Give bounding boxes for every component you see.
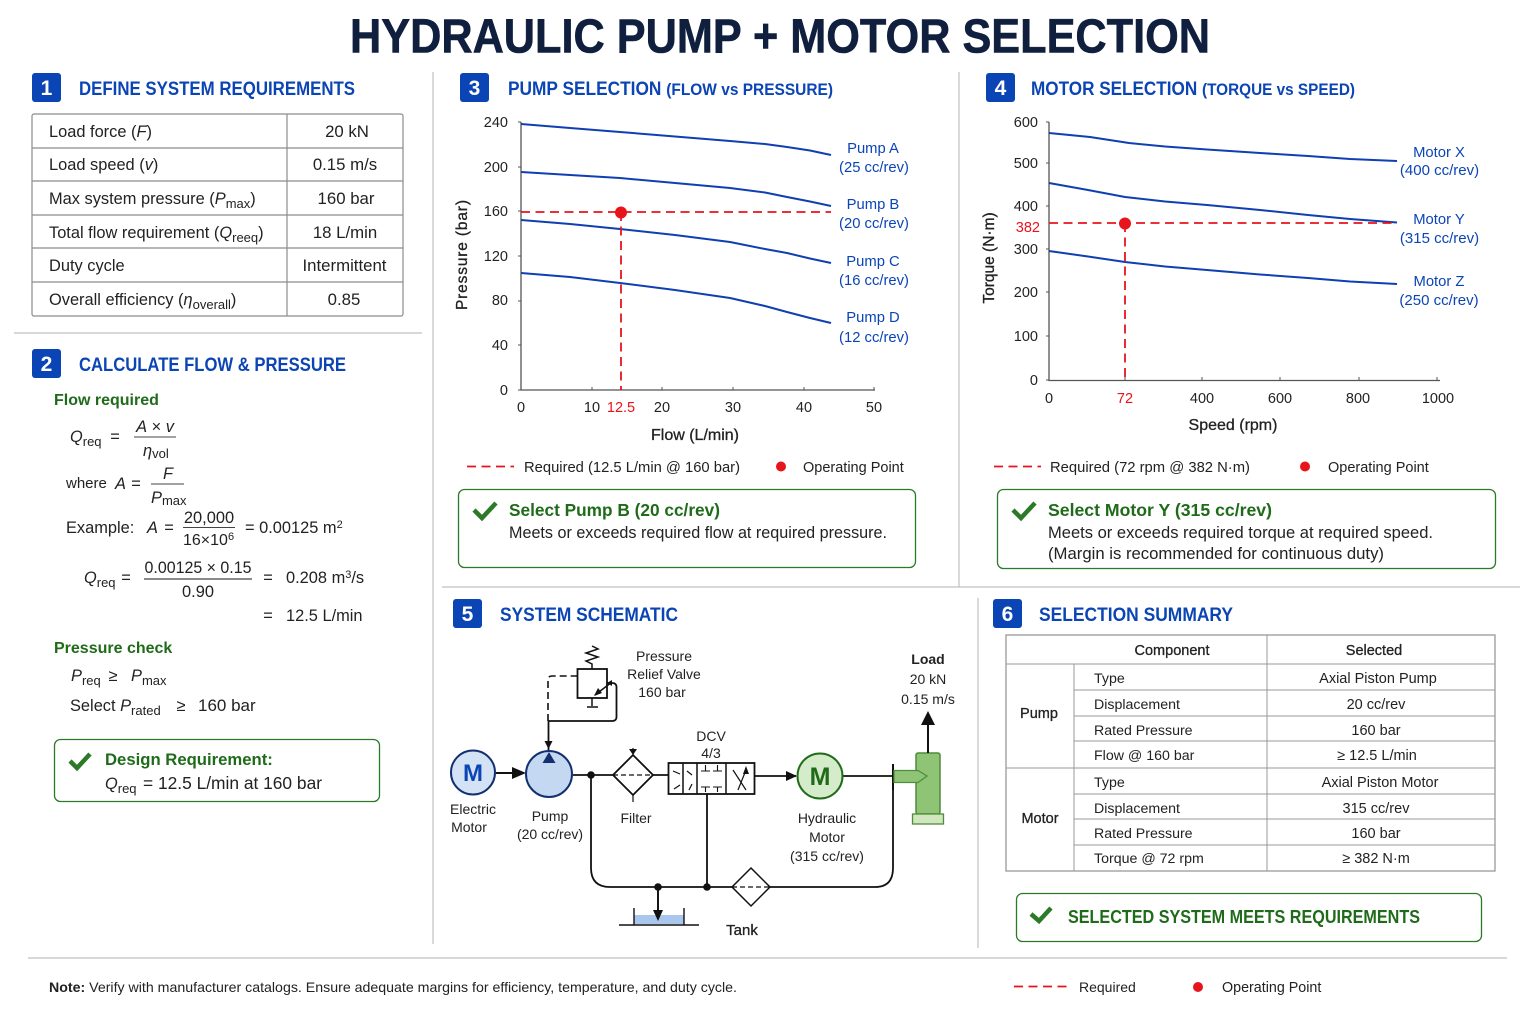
summary table: ≥ 382 N·m <box>1342 851 1410 867</box>
pump chart: 20 <box>654 400 670 416</box>
flow equations: η <box>143 442 152 460</box>
flow equations: req <box>97 575 116 590</box>
summary table: 160 bar <box>1351 723 1401 739</box>
pump chart legend: Operating Point <box>803 460 904 476</box>
hydraulic lines <box>544 676 893 918</box>
pump chart: 120 <box>484 249 508 265</box>
heading 3: PUMP SELECTION (FLOW vs PRESSURE) <box>508 79 833 100</box>
heading 2: 2 <box>41 353 52 376</box>
flow equations: A <box>146 519 158 537</box>
requirements table: ) <box>231 291 236 309</box>
icon: tank <box>619 890 699 925</box>
motor chart: 400 <box>1014 199 1038 215</box>
label: directional control valve: DCV <box>696 728 726 744</box>
requirements table: ) <box>250 190 256 208</box>
label: load: 20 kN <box>910 671 946 687</box>
summary table: Motor <box>1021 811 1059 827</box>
summary table: Component <box>1135 643 1209 659</box>
motor chart: 600 <box>1268 391 1292 407</box>
icon: pump <box>526 751 572 797</box>
summary table: Type <box>1094 775 1125 791</box>
requirements table: Max system pressure (P <box>49 190 226 208</box>
label: load: Load <box>911 651 945 667</box>
requirements table: Duty cycle <box>49 257 125 275</box>
flow equations: vol <box>152 446 169 461</box>
heading 5: 5 <box>462 603 474 626</box>
requirements table: Total flow requirement (Q <box>49 224 232 242</box>
label: filter: Filter <box>620 810 652 826</box>
flow equations: Example: <box>66 519 134 537</box>
heading 6 <box>993 599 1233 628</box>
flow equations: = <box>263 569 273 587</box>
requirements table: Overall efficiency (η <box>49 291 193 309</box>
flow required subheading: Flow required <box>54 392 159 409</box>
callout: design requirement: = 12.5 L/min at 160 bar <box>143 773 322 793</box>
summary table: Type <box>1094 671 1125 687</box>
summary table <box>1006 635 1495 871</box>
pump chart: 10 <box>584 400 600 416</box>
summary table: Displacement <box>1094 801 1180 817</box>
pressure equations: P <box>131 667 142 685</box>
callout: select motor Y: (Margin is recommended for continuous duty) <box>1048 545 1384 563</box>
pump chart <box>454 115 909 444</box>
heading 1 <box>32 73 355 102</box>
motor chart: 1000 <box>1422 391 1454 407</box>
summary table: Rated Pressure <box>1094 723 1193 739</box>
requirements table: 0.85 <box>328 290 360 309</box>
motor chart: 100 <box>1014 329 1038 345</box>
icon: return filter <box>732 868 770 906</box>
flow equations: = <box>131 475 141 493</box>
requirements table: 18 L/min <box>313 223 377 242</box>
callout: design requirement: Design Requirement: <box>105 750 273 769</box>
summary table: Axial Piston Pump <box>1319 671 1437 687</box>
pressure equations: 160 bar <box>198 696 256 715</box>
summary table: Rated Pressure <box>1094 826 1193 842</box>
summary table: Flow @ 160 bar <box>1094 748 1195 764</box>
requirements table: Intermittent <box>303 256 387 275</box>
pressure equations: rated <box>131 703 161 718</box>
pump chart: 0 <box>500 383 508 399</box>
flow equations: /s <box>351 569 364 587</box>
pump chart: Pump A <box>847 141 899 157</box>
callout: select motor Y: Meets or exceeds required torque at required speed. <box>1048 524 1433 542</box>
summary table: Axial Piston Motor <box>1322 775 1439 791</box>
footer legend: Operating Point <box>1222 980 1321 996</box>
heading 3: 3 <box>469 77 480 100</box>
footer note: Note: Verify with manufacturer catalogs. Ensure adequate margins for efficiency, temperature, and duty cycle. <box>49 979 737 995</box>
flow equations: A <box>114 475 126 493</box>
flow equations: 0.208 m <box>286 569 345 587</box>
motor chart: 500 <box>1014 156 1038 172</box>
callout: design requirement <box>54 740 380 802</box>
flow equations: 2 <box>337 519 343 531</box>
flow equations: 12.5 L/min <box>286 607 363 625</box>
label: load: 0.15 m/s <box>901 691 955 707</box>
motor chart legend <box>994 460 1429 476</box>
pump chart: (25 cc/rev) <box>839 160 909 176</box>
requirements table: 160 bar <box>318 189 375 208</box>
panel: define system requirements <box>32 73 403 316</box>
flow equations: where <box>65 475 107 492</box>
flow equations: = <box>121 569 131 587</box>
pressure equations: max <box>142 673 167 688</box>
flow equations: req <box>83 434 102 449</box>
requirements table: max <box>226 196 251 211</box>
pump chart: 40 <box>796 400 812 416</box>
flow equations: = <box>110 428 120 446</box>
title: HYDRAULIC PUMP + MOTOR SELECTION <box>350 10 1210 64</box>
pump chart: Flow (L/min) <box>651 427 739 444</box>
pump chart: 50 <box>866 400 882 416</box>
icon: hydraulic motor: M <box>810 763 830 791</box>
icon: directional control valve <box>668 763 754 794</box>
heading 3 <box>460 73 833 102</box>
pump chart: Pump C <box>846 254 900 270</box>
label: pressure relief valve: 160 bar <box>638 684 686 700</box>
label: hydraulic motor: Motor <box>809 829 845 845</box>
pump chart: 30 <box>725 400 741 416</box>
label: electric motor: Motor <box>451 819 487 835</box>
requirements table: ) <box>258 224 264 242</box>
motor chart: 200 <box>1014 285 1038 301</box>
icon: actuator cylinder <box>893 711 944 824</box>
callout: design requirement: req <box>118 781 137 796</box>
motor chart: 400 <box>1190 391 1214 407</box>
callout: select motor Y: Select Motor Y (315 cc/rev) <box>1048 500 1272 520</box>
flow equations: max <box>162 493 187 508</box>
icon: electric motor: M <box>463 760 483 787</box>
motor chart: Motor Y <box>1413 212 1465 228</box>
flow equations: Q <box>70 428 83 446</box>
motor chart: (250 cc/rev) <box>1399 292 1479 309</box>
motor chart: Motor Z <box>1414 274 1464 290</box>
label: hydraulic motor: (315 cc/rev) <box>790 848 864 864</box>
flow equations: Q <box>84 569 97 587</box>
pump chart: (16 cc/rev) <box>839 273 909 289</box>
pressure equations: ≥ <box>176 697 186 715</box>
heading 5 <box>453 599 678 628</box>
flow equations: = 0.00125 m <box>245 519 337 537</box>
motor chart: 300 <box>1014 242 1038 258</box>
flow equations: 6 <box>228 531 234 543</box>
requirements table: reeq <box>232 230 258 245</box>
motor chart: Motor X <box>1413 145 1465 161</box>
summary table: ≥ 12.5 L/min <box>1337 748 1417 764</box>
pump chart: 12.5 <box>607 400 635 416</box>
summary table: Torque @ 72 rpm <box>1094 851 1204 867</box>
pump chart: Pump D <box>846 310 900 326</box>
flow equations: F <box>163 465 174 483</box>
heading 5: SYSTEM SCHEMATIC <box>500 605 678 626</box>
label: pressure relief valve: Pressure <box>636 648 692 664</box>
motor chart: Torque (N·m) <box>981 212 998 304</box>
label: tank: Tank <box>726 922 758 939</box>
motor chart: (400 cc/rev) <box>1400 162 1479 179</box>
callout: select pump B <box>458 490 916 568</box>
callout: select pump B: Select Pump B (20 cc/rev) <box>509 500 720 520</box>
panel: calculate flow and pressure <box>32 349 380 802</box>
pressure equations: ≥ <box>108 667 118 685</box>
motor chart: Speed (rpm) <box>1189 417 1277 434</box>
label: pressure relief valve: Relief Valve <box>627 666 701 682</box>
pump chart: 0 <box>517 400 525 416</box>
icon: electric motor <box>451 750 526 794</box>
pressure equations: Select P <box>70 697 131 715</box>
heading 6: SELECTION SUMMARY <box>1039 605 1233 626</box>
requirements table: Load force (F) <box>49 123 152 141</box>
flow equations: P <box>151 489 162 507</box>
heading 2: CALCULATE FLOW & PRESSURE <box>79 355 346 376</box>
footer legend <box>1014 979 1321 996</box>
callout: select pump B: Meets or exceeds required flow at required pressure. <box>509 524 887 542</box>
flow equations: 0.90 <box>182 583 214 601</box>
motor chart: 800 <box>1346 391 1370 407</box>
panel: selection summary <box>993 599 1495 942</box>
pressure equations: P <box>71 667 82 685</box>
pump chart: 240 <box>484 115 508 131</box>
heading 1: DEFINE SYSTEM REQUIREMENTS <box>79 79 355 100</box>
pump chart: (20 cc/rev) <box>839 216 909 232</box>
pump chart: 200 <box>484 160 508 176</box>
flow equations: 20,000 <box>184 509 234 527</box>
label: pump: Pump <box>532 808 568 824</box>
heading 2 <box>32 349 346 378</box>
heading 6: 6 <box>1002 603 1013 626</box>
motor chart: (315 cc/rev) <box>1400 230 1479 247</box>
pump chart: 160 <box>484 204 508 220</box>
panel: motor selection <box>981 73 1496 568</box>
motor chart legend: Required (72 rpm @ 382 N·m) <box>1050 460 1250 476</box>
flow equations: 3 <box>345 569 351 581</box>
motor chart: 0 <box>1030 373 1038 389</box>
callout: system meets requirements <box>1016 894 1482 942</box>
motor chart legend: Operating Point <box>1328 460 1429 476</box>
motor chart: 72 <box>1117 391 1133 407</box>
heading 4: MOTOR SELECTION (TORQUE vs SPEED) <box>1031 79 1355 100</box>
icon: filter <box>613 748 653 802</box>
label: hydraulic motor: Hydraulic <box>798 810 856 826</box>
motor chart: 600 <box>1014 115 1038 131</box>
requirements table: 0.15 m/s <box>313 155 377 174</box>
summary table: 315 cc/rev <box>1343 801 1410 817</box>
pressure equations <box>70 667 256 718</box>
motor chart: 0 <box>1045 391 1053 407</box>
flow equations <box>65 418 364 625</box>
footer legend: Required <box>1079 979 1136 995</box>
pump chart legend <box>467 460 904 476</box>
requirements table <box>32 114 403 316</box>
summary table: Selected <box>1346 643 1402 659</box>
heading 4 <box>986 73 1355 102</box>
requirements table: overall <box>193 297 231 312</box>
pump chart: 80 <box>492 293 508 309</box>
pump chart legend: Required (12.5 L/min @ 160 bar) <box>524 460 740 476</box>
pump chart: Pressure (bar) <box>454 200 471 310</box>
panel: pump selection <box>454 73 916 568</box>
label: electric motor: Electric <box>450 801 496 817</box>
label: directional control valve: 4/3 <box>701 745 721 761</box>
flow equations: A × v <box>135 418 175 436</box>
heading 4: 4 <box>995 77 1007 100</box>
panel: system schematic <box>450 599 955 939</box>
pump chart: 40 <box>492 338 508 354</box>
motor chart: 382 <box>1016 220 1040 236</box>
icon: hydraulic motor <box>798 754 842 798</box>
flow equations: 16×10 <box>183 532 228 549</box>
requirements table: Load speed (v) <box>49 156 158 174</box>
callout: design requirement: Q <box>105 775 118 793</box>
flow equations: = <box>164 519 174 537</box>
pump chart: Pump B <box>847 197 899 213</box>
icon: pressure relief valve <box>578 646 612 707</box>
summary table: Pump <box>1020 706 1058 722</box>
heading 1: 1 <box>41 77 53 100</box>
pump chart: (12 cc/rev) <box>839 330 909 346</box>
summary table: Displacement <box>1094 697 1180 713</box>
pressure check subheading: Pressure check <box>54 640 172 657</box>
flow equations: = <box>263 607 273 625</box>
label: pump: (20 cc/rev) <box>517 826 583 842</box>
flow equations: 0.00125 × 0.15 <box>144 559 252 577</box>
callout: system meets requirements: SELECTED SYSTEM MEETS REQUIREMENTS <box>1068 907 1420 927</box>
summary table: 20 cc/rev <box>1347 697 1406 713</box>
motor chart <box>981 115 1479 434</box>
pressure equations: req <box>82 673 101 688</box>
summary table: 160 bar <box>1351 826 1401 842</box>
requirements table: 20 kN <box>325 122 369 141</box>
callout: select motor Y <box>998 490 1496 568</box>
